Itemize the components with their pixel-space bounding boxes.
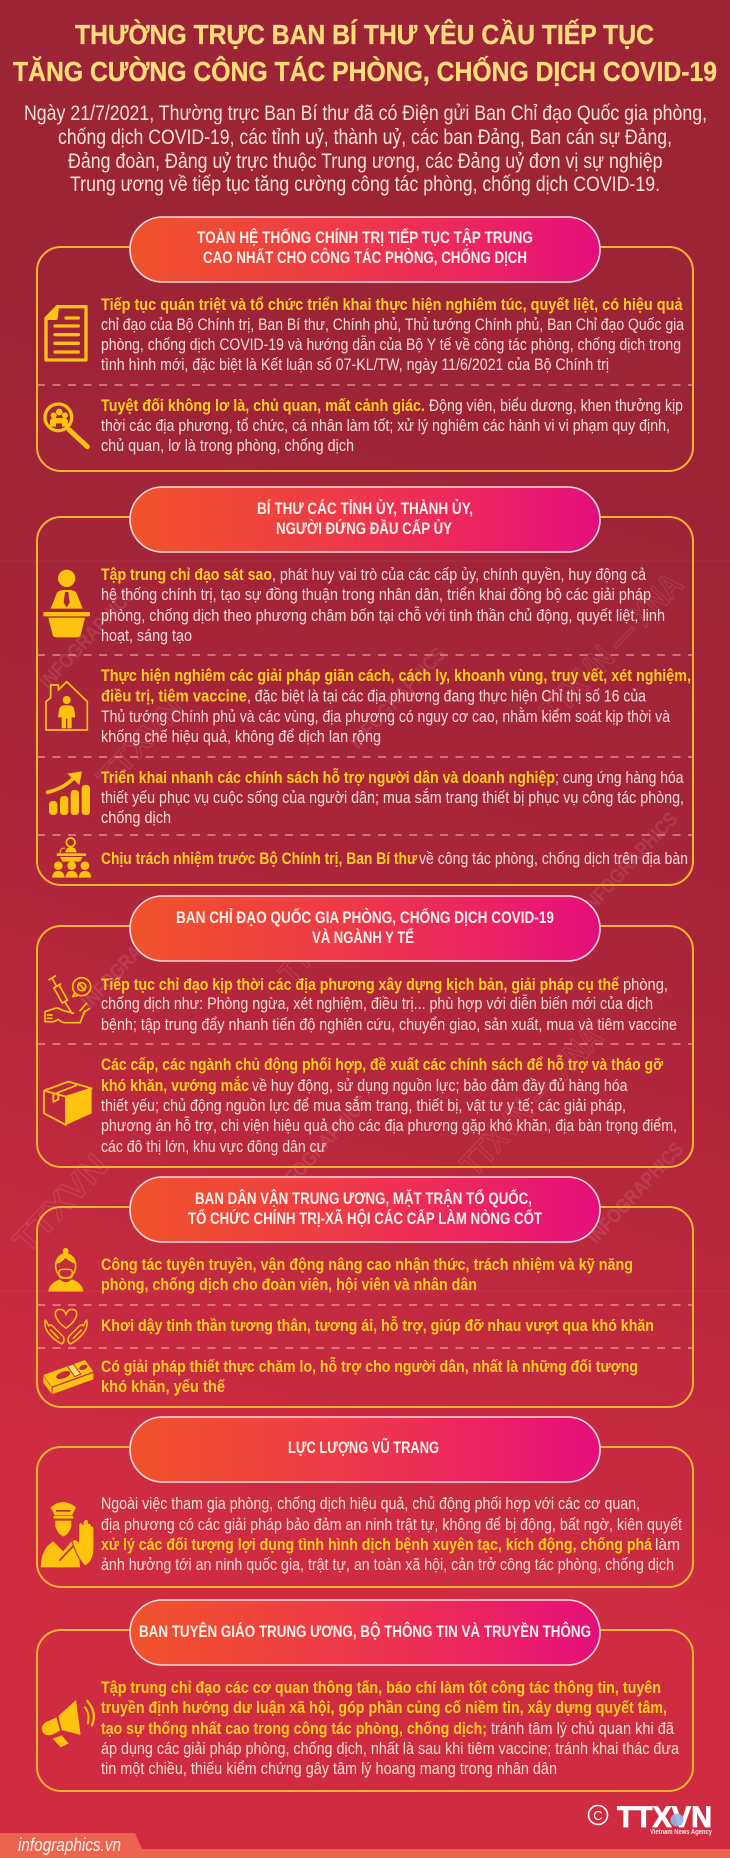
- icon: meeting: [52, 838, 91, 878]
- item text: chăm lo: khó khăn, yếu thế: [101, 1377, 225, 1396]
- panel heading pill: [130, 896, 600, 961]
- icon: magnifier over people: [45, 404, 87, 447]
- watermark pattern: [0, 561, 730, 1291]
- item text: thông tin tuyên truyền: tin một chiều, thiếu kiểm chứng gây tâm lý hoang mang trong nhân dân: [101, 1759, 557, 1778]
- watermark pattern: INFOGRAPHICS: [270, 1091, 374, 1201]
- panel: ban chỉ đạo quốc gia: [37, 896, 693, 1167]
- item text: tuyên truyền: [101, 1255, 633, 1294]
- panel frame: [37, 247, 693, 471]
- panel: bí thư các tỉnh ủy: [37, 487, 693, 885]
- logo: TTXVN: C: [593, 1808, 603, 1823]
- panel heading pill: BÍ THƯ CÁC TỈNH ỦY, THÀNH ỦY,: [257, 499, 473, 518]
- item text: kịch bản: phòng,: [623, 975, 668, 994]
- item text: chính sách hỗ trợ: [101, 768, 684, 827]
- icon: woman with mask: [48, 1248, 83, 1292]
- item text: tháo gỡ khó khăn: [101, 1055, 677, 1156]
- watermark pattern: INFOGRAPHICS: [346, 643, 450, 753]
- panel heading pill: BAN DÂN VẬN TRUNG ƯƠNG, MẶT TRẬN TỔ QUỐC,: [195, 1188, 532, 1208]
- panel heading pill: VÀ NGÀNH Y TẾ: [312, 928, 414, 947]
- item text: không lơ là: Tuyệt đối không lơ là, chủ quan, mất cảnh giác.: [101, 396, 425, 415]
- icon: speaker at podium: [43, 570, 90, 637]
- panel frame: [37, 1447, 693, 1587]
- panel heading pill: TỔ CHỨC CHÍNH TRỊ-XÃ HỘI CÁC CẤP LÀM NÒNG CỐT: [188, 1208, 542, 1228]
- item text: quán triệt: tình hình mới, đặc biệt là Kết luận số 07-KL/TW, ngày 11/6/2021 của Bộ Chính trị: [101, 355, 609, 374]
- title: THƯỜNG TRỰC BAN BÍ THƯ YÊU CẦU TIẾP TỤC: [75, 19, 654, 50]
- panel frame: [37, 517, 693, 885]
- panel heading pill: BAN TUYÊN GIÁO TRUNG ƯƠNG, BỘ THÔNG TIN VÀ TRUYỀN THÔNG: [139, 1622, 591, 1641]
- item text: chịu trách nhiệm: Chịu trách nhiệm trước Bộ Chính trị, Ban Bí thư: [101, 849, 418, 868]
- watermark pattern: TTXVN: [91, 692, 190, 795]
- item text: tuyên truyền: Công tác tuyên truyền, vận động nâng cao nhận thức, trách nhiệm và kỹ năng: [101, 1255, 633, 1274]
- icon: growth chart: [48, 771, 90, 815]
- item text: không lơ là: chủ quan, lơ là trong phòng, chống dịch: [101, 436, 354, 455]
- panel heading pill: [130, 1600, 600, 1665]
- panel: toàn hệ thống chính trị: [37, 217, 693, 471]
- panel: ban dân vận: [37, 1177, 693, 1407]
- item text: không lơ là: Động viên, biểu dương, khen thưởng kịp: [429, 396, 683, 415]
- item text: chỉ đạo sát sao: [101, 565, 665, 645]
- item text: chỉ đạo sát sao: hệ thống chính trị, tạo sự đồng thuận trong nhân dân, triển khai đồng bộ các giải pháp: [101, 585, 651, 604]
- item text: chăm lo: Có giải pháp thiết thực chăm lo, hỗ trợ cho người dân, nhất là những đối tượng: [101, 1357, 638, 1376]
- watermark pattern: TTXVN — XNA: [533, 566, 690, 730]
- footer band: infographics.vn: [18, 1835, 121, 1855]
- item text: lực lượng vũ trang: Ngoài việc tham gia phòng, chống dịch hiệu quả, chủ động phối hợp với các cơ quan,: [101, 1494, 640, 1513]
- item text: lực lượng vũ trang: làm: [655, 1535, 680, 1554]
- panel heading pill: LỰC LƯỢNG VŨ TRANG: [288, 1437, 439, 1457]
- item text: tháo gỡ khó khăn: các đô thị lớn, khu vực đông dân cư: [101, 1137, 326, 1156]
- item text: chính sách hỗ trợ: Triển khai nhanh các chính sách hỗ trợ người dân và doanh nghiệp: [101, 768, 555, 787]
- item text: tháo gỡ khó khăn: về huy động, sử dụng nguồn lực; bảo đảm đầy đủ hàng hóa: [252, 1076, 628, 1095]
- item text: kịch bản: Tiếp tục chỉ đạo kịp thời các địa phương xây dựng kịch bản, giải pháp cụ thể: [101, 975, 619, 994]
- icon: box: [44, 1082, 92, 1125]
- item text: chịu trách nhiệm: [101, 849, 688, 868]
- icon: megaphone: [42, 1700, 94, 1747]
- footer band: [0, 1833, 730, 1858]
- icon: document: [46, 307, 86, 360]
- watermark pattern: INFOGRAPHICS: [78, 903, 182, 1013]
- logo: TTXVN: TTXVN: [617, 1801, 712, 1834]
- item text: tháo gỡ khó khăn: khó khăn, vướng mắc: [101, 1076, 249, 1095]
- icon: heart in hands: [45, 1309, 87, 1344]
- watermark pattern: INFOGRAPHICS: [584, 1138, 688, 1248]
- panel heading pill: CAO NHẤT CHO CÔNG TÁC PHÒNG, CHỐNG DỊCH: [203, 247, 527, 267]
- icon: money stack: [43, 1360, 93, 1394]
- panel frame: [37, 926, 693, 1167]
- item text: chỉ đạo sát sao: , phát huy vai trò của các cấp ủy, chính quyền, huy động cả: [272, 565, 646, 584]
- panel heading pill: TOÀN HỆ THỐNG CHÍNH TRỊ TIẾP TỤC TẬP TRUNG: [197, 227, 533, 247]
- panel heading pill: [130, 1417, 600, 1482]
- icon: vaccine syringe and arm: [45, 976, 91, 1023]
- item text: thông tin tuyên truyền: tạo sự thống nhất cao trong công tác phòng, chống dịch;: [101, 1719, 487, 1738]
- title: [13, 19, 717, 87]
- watermark pattern: TTXVN — XNA: [453, 1019, 610, 1183]
- panel heading pill: [130, 1177, 600, 1242]
- item text: kịch bản: [101, 975, 677, 1034]
- item text: không lơ là: [101, 396, 683, 455]
- item text: giãn cách: , đặc biệt là tại các địa phương đang thực hiện Chỉ thị số 16 của: [247, 686, 646, 706]
- item text: giãn cách: điều trị, tiêm vaccine: [101, 686, 247, 706]
- watermark pattern: INFOGRAPHICS: [36, 583, 140, 693]
- item text: giãn cách: khống chế hiệu quả, không để dịch lan rộng: [101, 727, 381, 746]
- item text: tháo gỡ khó khăn: thiết yếu; chủ động nguồn lực để mua sắm trang, thiết bị, vật tư y tế; các giải pháp,: [101, 1096, 626, 1115]
- item text: chỉ đạo sát sao: hoạt, sáng tạo: [101, 626, 192, 645]
- item text: giãn cách: [101, 666, 691, 746]
- panel: lực lượng vũ trang: [37, 1417, 693, 1587]
- panel heading pill: NGƯỜI ĐỨNG ĐẦU CẤP ỦY: [276, 519, 452, 538]
- logo: TTXVN: Vietnam News Agency: [650, 1827, 713, 1836]
- panel heading pill: [130, 217, 600, 282]
- watermark pattern: INFOGRAPHICS: [578, 808, 682, 918]
- item text: tuyên truyền: phòng, chống dịch cho đoàn viên, hội viên và nhân dân: [101, 1275, 477, 1294]
- watermark pattern: TTXVN: [6, 1147, 116, 1260]
- item text: quán triệt: [101, 295, 684, 374]
- panel frame: [37, 1630, 693, 1791]
- item text: chính sách hỗ trợ: chống dịch: [101, 808, 171, 827]
- watermark pattern: TTXVN: [273, 901, 358, 990]
- item text: chăm lo: [101, 1357, 638, 1396]
- item text: thông tin tuyên truyền: [101, 1678, 679, 1778]
- intro text: [24, 102, 707, 196]
- icon: person in house: [46, 682, 87, 730]
- icon: police officer: [41, 1502, 94, 1567]
- item text: thông tin tuyên truyền: tránh tâm lý chủ quan khi đã: [491, 1719, 674, 1738]
- item text: chỉ đạo sát sao: Tập trung chỉ đạo sát sao: [101, 565, 272, 584]
- item text: lực lượng vũ trang: [101, 1494, 682, 1574]
- panel frame: [37, 1207, 693, 1407]
- panel heading pill: [130, 487, 600, 552]
- panel: ban tuyên giáo: [37, 1600, 693, 1791]
- panel heading pill: BAN CHỈ ĐẠO QUỐC GIA PHÒNG, CHỐNG DỊCH COVID-19: [176, 907, 554, 927]
- item text: chính sách hỗ trợ: ; cung ứng hàng hóa: [555, 768, 684, 787]
